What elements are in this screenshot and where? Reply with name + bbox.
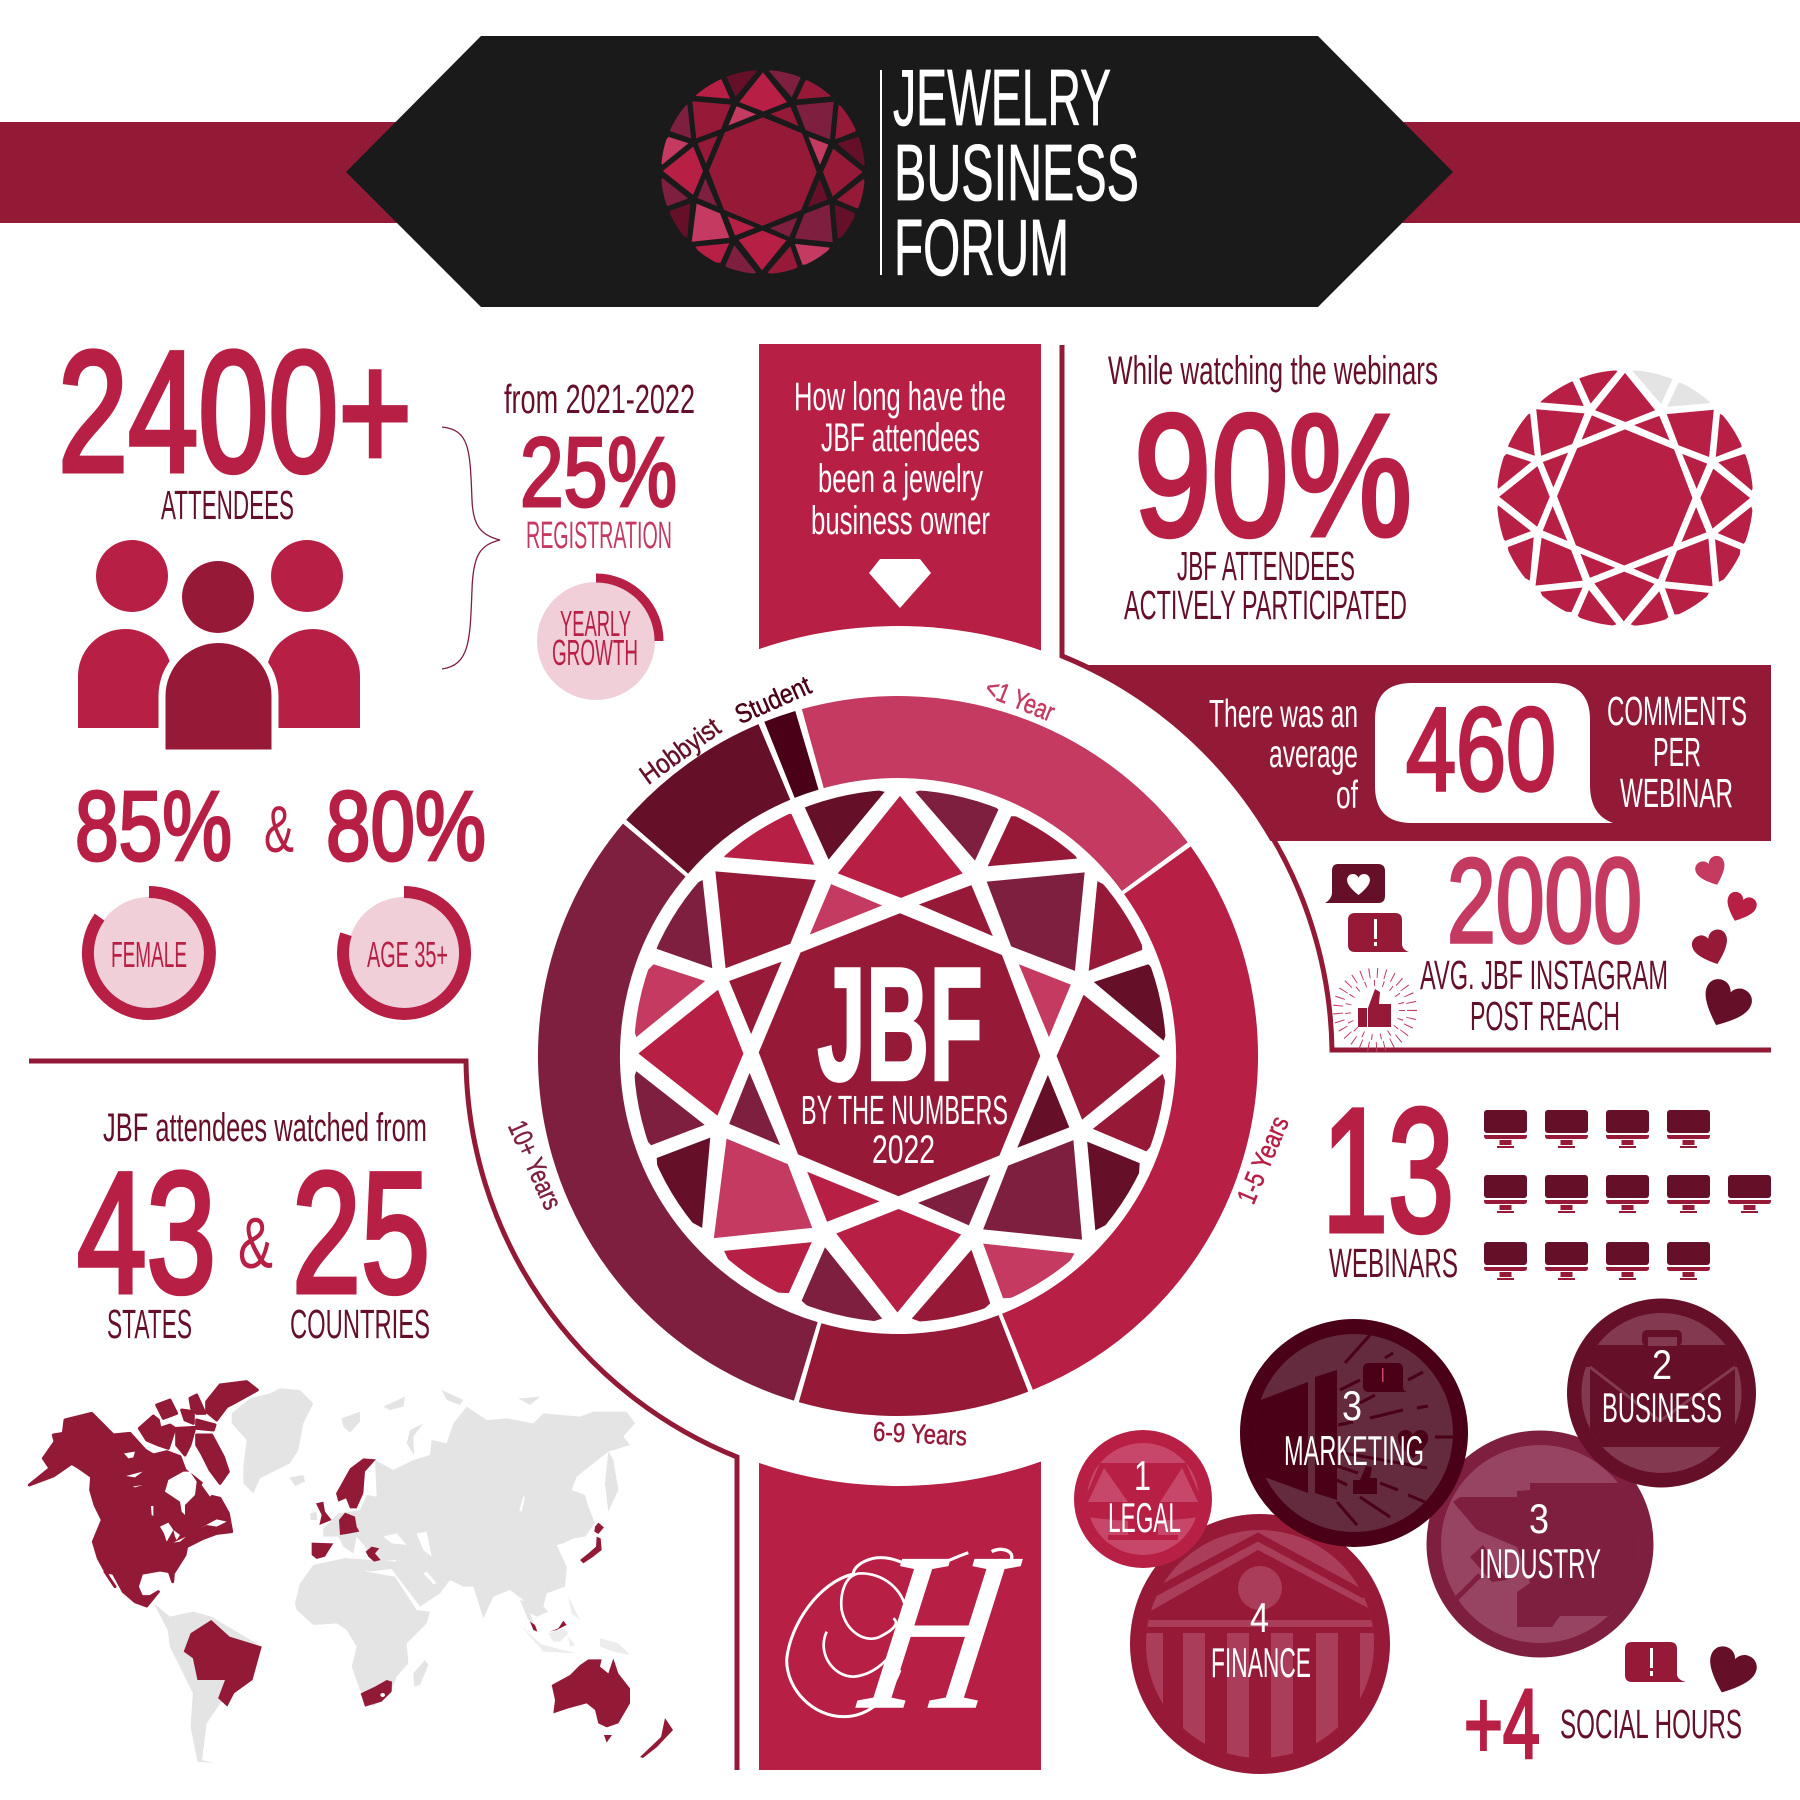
bubble: marketing: 3 (1342, 1382, 1362, 1429)
segment: 6-9 years (810, 1353, 1013, 1375)
ampersand: & (264, 792, 294, 866)
bubble: industry (1426, 1430, 1654, 1658)
question text: JBF attendees (821, 416, 980, 460)
segment labels: 6-9 Years (872, 1417, 968, 1451)
icons: monitors (1484, 1110, 1771, 1280)
80%: 80% (326, 771, 486, 881)
title: FORUM (894, 203, 1069, 292)
comments stat (1209, 683, 1747, 823)
title: JEWELRY (893, 53, 1111, 142)
2400+: 2400+ (58, 316, 412, 508)
map: new zealand (640, 1718, 673, 1758)
gem: 90 percent (1491, 364, 1759, 632)
comments stat: PER (1653, 729, 1701, 775)
attendees block (58, 316, 412, 753)
icon: heart (1700, 1643, 1760, 1701)
map: eastern hemisphere (232, 1388, 635, 1743)
25: 25 (292, 1137, 430, 1329)
segment labels: 10+ Years (502, 1116, 568, 1214)
title: BUSINESS (894, 128, 1139, 217)
geography stat: JBF attendees watched from (103, 1106, 427, 1150)
logo panel script: H (847, 1508, 1031, 1757)
segment labels: Hobbyist (634, 712, 726, 790)
instagram stat (1325, 834, 1759, 1047)
bubble: finance (1130, 1514, 1390, 1774)
43: 43 (77, 1137, 216, 1329)
brace (442, 427, 500, 669)
left section line (29, 1061, 737, 1770)
webinar participation: ACTIVELY PARTICIPATED (1124, 582, 1407, 628)
webinars stat (1322, 1073, 1771, 1286)
2000: 2000 (1447, 834, 1642, 968)
attendees label: ATTENDEES (161, 482, 294, 528)
icon: thumbs up (1338, 973, 1412, 1047)
question text: How long have the (794, 375, 1006, 419)
question text: business owner (811, 499, 990, 543)
bubble: marketing (1240, 1319, 1468, 1547)
donut: yearly growth: YEARLY (560, 603, 631, 644)
countries label: COUNTRIES (290, 1301, 430, 1347)
segment: student (780, 750, 807, 760)
donut: age (343, 892, 465, 1014)
donut: yearly growth (537, 578, 659, 700)
speech bubble (1375, 683, 1613, 823)
comments stat: of (1336, 774, 1358, 817)
social hours (1464, 1642, 1760, 1779)
bubble: business: 2 (1652, 1341, 1672, 1388)
from years: from 2021-2022 (504, 376, 695, 422)
geography stat (77, 1106, 430, 1347)
ampersand: & (238, 1204, 273, 1284)
right band: comments (1060, 665, 1771, 841)
segment labels: <1 Year (981, 673, 1059, 727)
central title: BY THE NUMBERS (801, 1087, 1008, 1133)
topic bubbles (1074, 1298, 1760, 1774)
world map (29, 1382, 673, 1763)
bottom column: logo panel (759, 1430, 1041, 1770)
plus four: +4 (1464, 1669, 1540, 1779)
icon: people (78, 540, 360, 753)
bubble: industry: INDUSTRY (1479, 1540, 1601, 1587)
bubble: finance: FINANCE (1211, 1639, 1311, 1686)
instagram stat: POST REACH (1470, 993, 1620, 1039)
central title: JBF (817, 934, 983, 1115)
top column: question (759, 344, 1041, 684)
logo panel script (787, 1508, 1031, 1757)
donut chart: tenure (579, 737, 1217, 1375)
logo gem (656, 65, 870, 278)
segment labels: 1-5 Years (1231, 1112, 1295, 1208)
header plaque (346, 36, 1453, 307)
25%: 25% (520, 417, 677, 527)
question text: been a jewelry (818, 457, 983, 501)
icon: hearts (1689, 854, 1759, 1035)
bubble: industry: 3 (1529, 1495, 1549, 1542)
registration label: REGISTRATION (526, 515, 672, 557)
webinar participation (1108, 349, 1759, 632)
bubble: finance: 4 (1250, 1594, 1269, 1641)
90%: 90% (1134, 378, 1412, 572)
bubble: legal (1074, 1430, 1212, 1568)
icon: alert bubble (1348, 913, 1409, 952)
bubble: business (1560, 1298, 1760, 1488)
central title: 2022 (872, 1128, 935, 1172)
segment: 1-5 years (1018, 870, 1217, 1352)
bubble: marketing: MARKETING (1284, 1427, 1424, 1474)
participation label: JBF ATTENDEES (1177, 543, 1355, 589)
85%: 85% (75, 771, 232, 881)
13: 13 (1322, 1073, 1454, 1269)
460: 460 (1406, 684, 1556, 816)
central white disc (468, 626, 1328, 1486)
donut: female: FEMALE (111, 934, 187, 975)
icon: diamond (869, 559, 931, 608)
comments stat: average (1269, 733, 1358, 776)
central gem (621, 778, 1179, 1334)
icon: alert bubble (1625, 1642, 1686, 1682)
states label: STATES (107, 1301, 192, 1347)
header band (0, 122, 1800, 223)
segment: under 1 year (813, 737, 1155, 867)
icon: heart bubble (1325, 864, 1385, 903)
webinars label: WEBINARS (1329, 1240, 1458, 1286)
demographics (75, 771, 486, 1014)
map: north america (29, 1382, 257, 1606)
registration block (504, 376, 695, 700)
map: americas south (154, 1603, 262, 1763)
segment labels (502, 670, 1295, 1451)
central title (801, 934, 1008, 1172)
comments stat: There was an (1209, 693, 1358, 736)
lead-in: While watching the webinars (1108, 349, 1438, 393)
right section line (1062, 345, 1771, 1050)
donut: female (88, 892, 210, 1014)
title (893, 53, 1139, 292)
bubble: legal: LEGAL (1108, 1494, 1181, 1541)
question text (794, 375, 1006, 608)
donut: age: AGE 35+ (367, 934, 448, 975)
bubble: legal: 1 (1134, 1452, 1151, 1499)
logo divider (880, 70, 882, 275)
segment: hobbyist (657, 762, 774, 847)
segment labels: Student (730, 670, 816, 730)
segment: 10+ years (579, 850, 806, 1361)
donut: yearly growth: GROWTH (552, 632, 638, 673)
